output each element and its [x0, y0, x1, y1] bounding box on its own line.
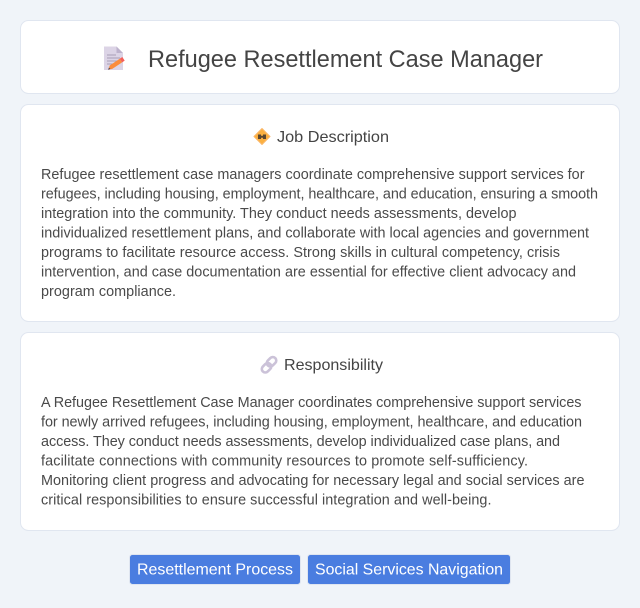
text block: responsibility: access. They conduct needs assessments, develop individualized case plans, and: [41, 434, 560, 450]
text block: job description: [41, 167, 598, 300]
title: Refugee Resettlement Case Manager: [148, 46, 543, 73]
button: resettlement process: [130, 554, 300, 584]
text block: responsibility: A Refugee Resettlement Case Manager coordinates comprehensive support services: [41, 395, 582, 411]
header panel: [20, 20, 620, 94]
button: resettlement process: Resettlement Process: [137, 562, 293, 578]
text block: job description: integration into the community. They conduct needs assessments, develop: [41, 206, 516, 222]
panel: job description: [20, 104, 620, 322]
text block: responsibility: Monitoring client progress and advocating for necessary legal and social services are: [41, 473, 584, 489]
text block: job description: program compliance.: [41, 284, 176, 300]
heading: responsibility: Responsibility: [284, 357, 383, 374]
text block: job description: individualized resettlement plans, and collaborate with local agencies and government: [41, 226, 589, 242]
button: social services navigation: [308, 554, 510, 584]
icon: chain link: [260, 356, 278, 374]
text block: job description: refugees, including housing, employment, healthcare, and education, ensuring a smooth: [41, 186, 598, 202]
heading: job description: Job Description: [277, 129, 389, 146]
button: social services navigation: Social Services Navigation: [315, 562, 503, 578]
text block: responsibility: [41, 395, 584, 508]
text block: responsibility: facilitate connections with community resources to promote self-sufficiency.: [41, 454, 528, 470]
text block: responsibility: critical responsibilities to ensure successful integration and well-being.: [41, 492, 492, 508]
text block: responsibility: for newly arrived refugees, including housing, employment, healthcare, and education: [41, 414, 582, 430]
text block: job description: programs to facilitate resource access. Strong skills in cultural competency, crisis: [41, 245, 560, 261]
panel: responsibility: [20, 332, 620, 530]
icon: diamond sign: [254, 128, 270, 144]
text block: job description: Refugee resettlement case managers coordinate comprehensive support services for: [41, 167, 585, 183]
text block: job description: intervention, and case documentation are essential for effective client advocacy and: [41, 264, 576, 280]
icon: document with pencil: [104, 46, 125, 70]
